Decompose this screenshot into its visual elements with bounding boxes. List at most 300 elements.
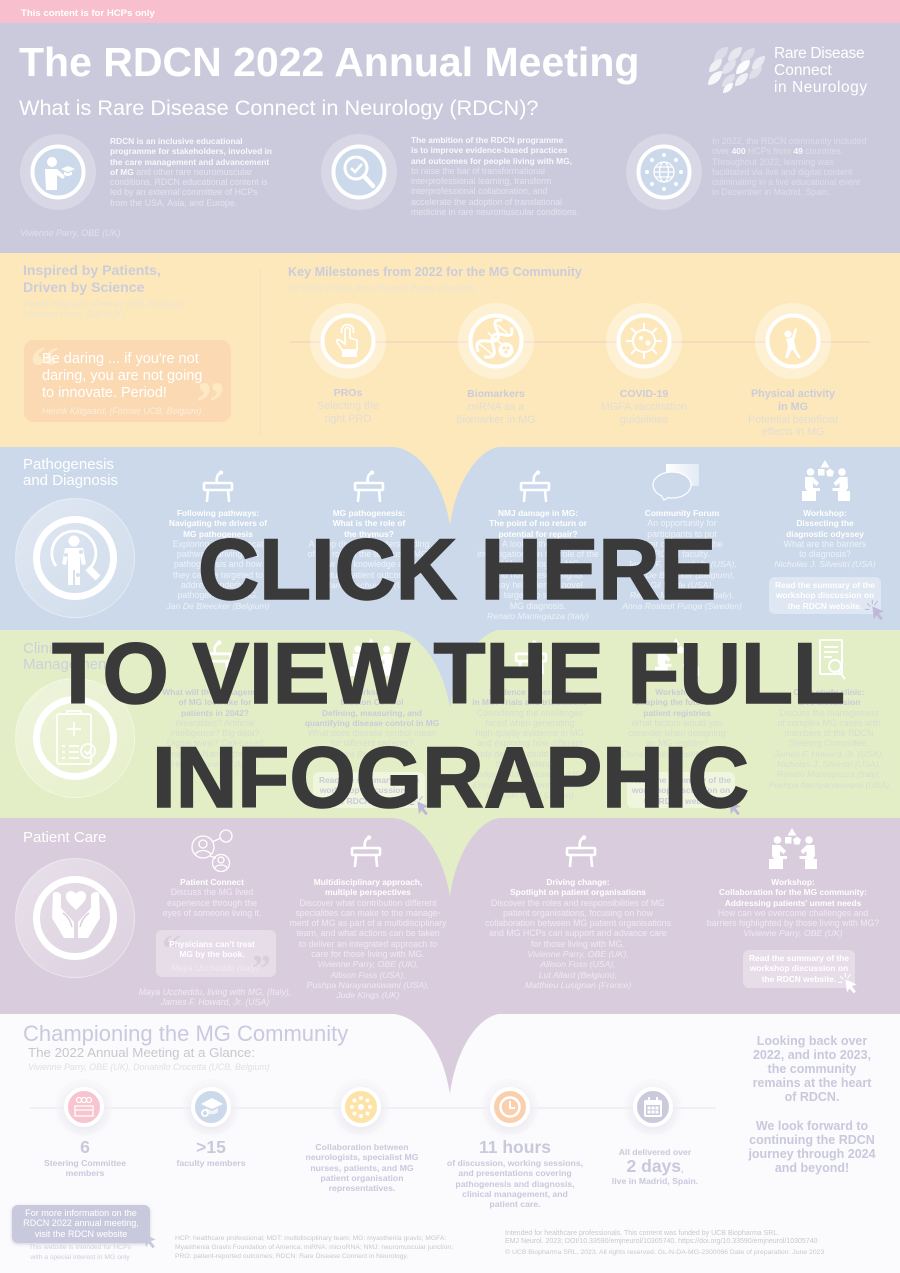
text: future of management: intelligence? Big data? bbox=[171, 728, 259, 738]
text: case study clinic: Steering Committee. bbox=[789, 738, 869, 748]
icon: workshop bbox=[350, 638, 394, 676]
calendar glyph bbox=[641, 1095, 665, 1119]
icon: cursor bbox=[865, 599, 886, 622]
text: community forum: Gil Wolfe (USA), bbox=[650, 580, 714, 590]
section heading bbox=[23, 641, 111, 672]
text: case study clinic: members of the RDCN bbox=[785, 728, 873, 738]
quote text: MG by the book. bbox=[179, 949, 245, 959]
text: community numbers: Throughout 2022, learning was bbox=[712, 157, 833, 167]
text: evidence generation: faced when generating bbox=[485, 718, 575, 728]
text: MG pathogenesis bbox=[308, 508, 430, 590]
button: workshop summary bbox=[769, 577, 881, 614]
text: MG pathogenesis: the thymus? bbox=[344, 529, 394, 539]
text: driving change bbox=[485, 877, 671, 990]
text: following pathways: Exploring the biological bbox=[173, 539, 263, 549]
text: workshop diagnostic odyssey: Workshop: bbox=[803, 508, 847, 518]
text: MG pathogenesis: Jan Verschuuren (UK) bbox=[326, 580, 412, 590]
timeline line bbox=[30, 1107, 716, 1109]
quote text: Be daring ... if you're not bbox=[42, 351, 199, 367]
text: mission control workshop: quantifying disease control in MG bbox=[305, 718, 439, 728]
callout: quote bbox=[24, 340, 231, 422]
text: future of management: What will the management bbox=[162, 687, 268, 697]
stat: collaboration: nurses, patients, and MG bbox=[310, 1163, 414, 1173]
text: workshop diagnostic odyssey: What are the barriers bbox=[784, 539, 866, 549]
icon: podium bbox=[514, 638, 548, 676]
text: NMJ damage: Renato Mantegazza (Italy) bbox=[487, 611, 589, 621]
text: multidisciplinary approach: care for those living with MG. bbox=[311, 949, 425, 959]
text: programme ambition: is to improve evidence-based practices bbox=[411, 145, 567, 155]
text: NMJ damage: NMJ damage in MG: bbox=[498, 508, 578, 518]
icon clipboard glyph bbox=[55, 710, 97, 768]
button: workshop summary bbox=[743, 950, 855, 988]
icon halo bbox=[606, 303, 682, 379]
text: following pathways: pathways driving MG bbox=[177, 549, 259, 559]
website note: This website is intended for HCPs bbox=[29, 1244, 131, 1251]
text: RDCN description bbox=[110, 136, 272, 208]
closing statement: continuing the RDCN bbox=[749, 1133, 875, 1147]
text: patient registries workshop: Elena Cortés-Vicente (Spain) bbox=[621, 749, 733, 759]
text: evidence generation: and exploring how different bbox=[477, 738, 583, 748]
stat: days bbox=[612, 1147, 698, 1187]
button: RDCN website bbox=[12, 1205, 150, 1243]
text: case study clinic: Live discussion bbox=[798, 697, 860, 707]
icon halo bbox=[626, 134, 702, 210]
text: workshop diagnostic odyssey: Dissecting the bbox=[796, 518, 854, 528]
quote text: daring, you are not going bbox=[42, 368, 202, 384]
quote attribution: Maya Uccheddu (Italy) bbox=[171, 963, 259, 973]
icon: workshop bbox=[802, 460, 850, 501]
button: workshop summary: workshop discussion on bbox=[776, 590, 874, 600]
text: future of management: patients in 2042? bbox=[181, 708, 249, 718]
icon halo bbox=[20, 134, 96, 210]
icon: clipboard bbox=[15, 678, 135, 798]
speaker credits bbox=[139, 987, 291, 1008]
overlay: click here call to action: TO VIEW THE FULL bbox=[52, 627, 845, 722]
icon: PROs touch bbox=[310, 303, 386, 379]
milestone: COVID-19: MGFA vaccination bbox=[601, 401, 687, 413]
milestone: physical activity: effects in MG bbox=[762, 426, 824, 438]
closing statement: journey through 2024 bbox=[748, 1147, 876, 1161]
text: following pathways: they can be targeted to bbox=[173, 570, 263, 580]
icon: steering committee bbox=[64, 1087, 104, 1127]
panel: patients and milestones bbox=[0, 253, 900, 447]
text: future of management: therapies? Nanotechnology? bbox=[159, 749, 271, 759]
logo text bbox=[774, 45, 868, 96]
stat: steering committee: Steering Committee bbox=[44, 1158, 126, 1168]
milestone: physical activity bbox=[748, 388, 838, 438]
milestone: COVID-19 bbox=[601, 388, 687, 426]
button: workshop summary: the RDCN website. bbox=[644, 796, 718, 806]
closing quote mark: ” bbox=[196, 370, 225, 435]
text: evidence generation: study designs could overcome bbox=[471, 749, 589, 759]
button: workshop summary: workshop discussion on bbox=[320, 785, 418, 795]
text: NMJ damage: A look at the latest bbox=[502, 539, 574, 549]
text: mission control workshop: Sara Brown (USA) bbox=[336, 749, 408, 759]
text: following pathways: MG pathogenesis bbox=[183, 529, 253, 539]
milestone: PROs bbox=[317, 387, 379, 425]
text: collaboration workshop: Collaboration for the MG community: bbox=[719, 887, 867, 897]
text: collaboration workshop bbox=[707, 877, 879, 939]
speaker credits: Gil Wolfe (USA), Anna Rostedt Punga (Sweden) bbox=[288, 283, 476, 293]
text: NMJ damage: MG diagnosis. bbox=[510, 601, 566, 611]
icon: clock bbox=[490, 1087, 530, 1127]
text: case study clinic: Discuss the management bbox=[779, 708, 879, 718]
text: community forum: Jan De Bleecker (Belgium), bbox=[629, 570, 735, 580]
stat: faculty: >15 bbox=[196, 1137, 226, 1157]
text: RDCN description: led by an external committee of HCPs bbox=[110, 187, 258, 197]
text: multidisciplinary approach bbox=[290, 877, 446, 1001]
text: driving change: Lut Allard (Belgium), bbox=[539, 970, 617, 980]
website note bbox=[29, 1243, 131, 1262]
text: NMJ damage: potential for repair? bbox=[498, 529, 578, 539]
text: patient connect: eyes of someone living it. bbox=[163, 908, 261, 918]
text: community forum: James F. Howard, Jr. (USA), bbox=[627, 559, 737, 569]
text: workshop diagnostic odyssey: diagnostic odyssey bbox=[786, 529, 864, 539]
network glyph bbox=[349, 1095, 373, 1119]
text: case study clinic: Renato Mantegazza (Italy), bbox=[777, 769, 881, 779]
text: mission control workshop: Defining, measuring, and bbox=[322, 708, 422, 718]
stat: collaboration: neurologists, specialist MG bbox=[306, 1152, 418, 1162]
text: case study clinic: Pushpa Narayanaswami (USA) bbox=[769, 780, 889, 790]
section heading: and Diagnosis bbox=[23, 472, 118, 488]
milestone: COVID-19: COVID-19 bbox=[620, 388, 668, 400]
opening quote mark: “ bbox=[162, 928, 181, 970]
text: NMJ damage bbox=[477, 508, 599, 621]
text: programme ambition: interprofessional learning, transform bbox=[411, 176, 551, 186]
text: community numbers bbox=[712, 136, 867, 197]
text: MG pathogenesis: MG pathogenesis: bbox=[333, 508, 405, 518]
callout: patient quote bbox=[156, 930, 276, 977]
text: patient registries workshop: patient registries bbox=[643, 708, 711, 718]
heading: inspired by patients: Inspired by Patients, bbox=[23, 262, 161, 278]
text: MG pathogenesis: A deep dive into understanding bbox=[309, 539, 429, 549]
text: case study clinic: of complex MG cases with bbox=[778, 718, 880, 728]
text: evidence generation: in MG: Trials and tribulations bbox=[472, 697, 588, 707]
stat: hours: patient care. bbox=[489, 1199, 541, 1209]
milestone: physical activity: in MG bbox=[778, 401, 808, 413]
section heading: Clinical bbox=[23, 640, 71, 657]
stat: collaboration: representatives. bbox=[329, 1183, 395, 1193]
icon: calendar bbox=[633, 1087, 673, 1127]
stat: days: 2 days, bbox=[627, 1156, 683, 1176]
icon: cursor bbox=[137, 1227, 158, 1250]
overlay: click here call to action: INFOGRAPHIC bbox=[152, 730, 749, 826]
text: collaboration workshop: How can we overcome challenges and bbox=[718, 908, 868, 918]
text: MG pathogenesis: future patient outcomes bbox=[323, 570, 415, 580]
button: workshop summary: the RDCN website. bbox=[788, 601, 862, 611]
icon: global community bbox=[626, 134, 702, 210]
text: mission control workshop: for different patients? bbox=[331, 738, 413, 748]
panel: introduction bbox=[0, 23, 900, 253]
text: mission control workshop: Mission Control bbox=[340, 697, 404, 707]
text: workshop diagnostic odyssey: Nicholas J. Silvestri (USA) bbox=[774, 559, 876, 569]
text: community forum: their questions to the bbox=[641, 539, 723, 549]
button: workshop summary: Read the summary of the bbox=[319, 775, 419, 785]
text: mission control workshop bbox=[305, 687, 439, 759]
text: multidisciplinary approach: ment of MG as part of a multidisciplinary bbox=[290, 918, 446, 928]
text: NMJ damage: investigations on the role of the bbox=[477, 549, 599, 559]
references: Intended for healthcare professionals. This content was funded by UCB Biopharma SRL. bbox=[505, 1230, 779, 1237]
text: future of management: Wearables? Artificial bbox=[175, 718, 255, 728]
text: patient registries workshop: an MG registry? bbox=[646, 738, 708, 748]
speaker credits: Vivienne Parry, OBE (UK), Donatello Crocetta (UCB, Belgium) bbox=[28, 1062, 270, 1072]
text: community numbers: In 2022, the RDCN community included bbox=[712, 136, 867, 146]
notch bbox=[0, 1014, 900, 1094]
text: following pathways: pathogenesis of MG. bbox=[177, 590, 259, 600]
milestone: biomarkers: Biomarkers bbox=[467, 388, 525, 400]
text: evidence generation: Hiroyuki Murai (Japan) bbox=[486, 790, 574, 800]
text: RDCN description: of MG and other rare neuromuscular bbox=[110, 167, 252, 177]
text: collaboration workshop: barriers highlighted by those living with MG? bbox=[707, 918, 879, 928]
text: programme ambition: The ambition of the RDCN programme bbox=[411, 135, 563, 145]
button: workshop summary: Read the summary of the bbox=[631, 775, 731, 785]
text: NMJ damage: NMJ pathology in MG, bbox=[494, 559, 582, 569]
text: community forum bbox=[622, 508, 742, 611]
icon: faculty bbox=[191, 1087, 231, 1127]
icon: educator bbox=[20, 134, 96, 210]
icon: workshop bbox=[655, 638, 699, 676]
text: multidisciplinary approach: to deliver an integrated approach to bbox=[299, 939, 437, 949]
stat: steering committee: 6 bbox=[80, 1137, 90, 1157]
closing quote mark: ” bbox=[252, 948, 271, 990]
section heading bbox=[23, 456, 118, 488]
heading: inspired by patients: Driven by Science bbox=[23, 279, 144, 295]
text: patient connect: Patient Connect bbox=[180, 877, 244, 887]
quote text bbox=[169, 939, 255, 960]
text: workshop diagnostic odyssey: to diagnosis? bbox=[799, 549, 851, 559]
text: future of management: Digital twins? Cell-based bbox=[167, 738, 263, 748]
text: patient connect: experience through the bbox=[167, 898, 257, 908]
text: RDCN description: conditions. RDCN educational content is bbox=[110, 177, 267, 187]
stat: hours: of discussion, working sessions, bbox=[447, 1158, 583, 1168]
icon halo bbox=[15, 498, 135, 618]
icon disc bbox=[320, 314, 376, 368]
button: workshop summary: workshop discussion on bbox=[750, 963, 848, 973]
text: RDCN description: the care management and advancement bbox=[110, 157, 269, 167]
text: patient connect bbox=[163, 877, 261, 918]
milestone: physical activity: Potential beneficial bbox=[748, 414, 838, 426]
stat: hours: pathogenesis and diagnosis, bbox=[455, 1179, 575, 1189]
closing statement: Looking back over bbox=[757, 1034, 867, 1048]
speaker credits: James F. Howard, Jr. (USA) bbox=[161, 997, 269, 1007]
text: following pathways: Navigating the drivers of bbox=[169, 518, 267, 528]
icon ring bbox=[33, 876, 117, 960]
text: community numbers: in December in Madrid, Spain. bbox=[712, 187, 830, 197]
divider bbox=[260, 268, 261, 437]
text: multidisciplinary approach: Vivienne Parry, OBE (UK), bbox=[317, 959, 419, 969]
button: RDCN website: For more information on the bbox=[25, 1208, 137, 1218]
text: community forum: Community Forum bbox=[645, 508, 719, 518]
closing statement: of RDCN. bbox=[785, 1090, 839, 1104]
heading: inspired by patients bbox=[23, 262, 161, 295]
stat: faculty bbox=[176, 1136, 246, 1168]
text: MG pathogenesis: What is the role of bbox=[333, 518, 405, 528]
panel: pathogenesis and diagnosis bbox=[0, 447, 900, 630]
text: following pathways: address underlying bbox=[181, 580, 255, 590]
milestone: biomarkers: biomarker in MG bbox=[456, 414, 536, 426]
stat: hours bbox=[447, 1136, 583, 1209]
text: multidisciplinary approach: multiple perspectives bbox=[325, 887, 411, 897]
text: case study clinic: Case study clinic: bbox=[793, 687, 865, 697]
icon: collaboration bbox=[341, 1087, 381, 1127]
text: NMJ damage: and how these insights bbox=[493, 570, 583, 580]
text: following pathways: pathogenesis and how bbox=[174, 559, 262, 569]
copyright: © UCB Biopharma SRL, 2023. All rights reserved. GL-N-DA-MG-2300066 Date of preparation: June 2023 bbox=[505, 1249, 824, 1256]
icon: podium bbox=[520, 470, 550, 502]
website note: with a special interest in MG only bbox=[30, 1254, 130, 1260]
speaker credits: Vivienne Parry, OBE (UK) bbox=[24, 309, 124, 319]
stat: steering committee bbox=[44, 1136, 126, 1179]
heading: key milestones: Key Milestones from 2022 for the MG Community bbox=[288, 265, 582, 279]
speaker credits bbox=[24, 299, 186, 319]
subtitle: What is Rare Disease Connect in Neurology (RDCN)? bbox=[19, 95, 538, 120]
milestone: biomarkers: miRNA as a bbox=[468, 401, 524, 413]
text: future of management: Henry Kaminski (USA) bbox=[172, 759, 258, 769]
text: following pathways: Jan De Bleecker (Belgium) bbox=[166, 601, 270, 611]
text: driving change: and MG HCPs can support and advance care bbox=[489, 928, 667, 938]
text: patient registries workshop: Shaping the future of bbox=[635, 697, 719, 707]
text: mission control workshop: Workshop: bbox=[350, 687, 394, 697]
icon disc bbox=[332, 144, 386, 200]
text: MG pathogenesis: of the role of the thymus in MG, bbox=[308, 549, 430, 559]
icon: physical activity bbox=[755, 303, 831, 379]
icon: patient connect bbox=[190, 828, 234, 872]
icon: cursor bbox=[410, 794, 431, 817]
icon hands and heart bbox=[50, 890, 102, 940]
icon: case study bbox=[818, 638, 846, 684]
text: evidence generation: these challenges. bbox=[496, 759, 564, 769]
icon: workshop bbox=[769, 828, 817, 869]
text: evidence generation: Evidence generation bbox=[489, 687, 571, 697]
heading: Championing the MG Community bbox=[23, 1021, 348, 1046]
milestone: PROs: PROs bbox=[334, 387, 362, 399]
text: multidisciplinary approach: Multidisciplinary approach, bbox=[314, 877, 422, 887]
closing statement: and beyond! bbox=[775, 1161, 849, 1175]
icon figure bbox=[50, 530, 100, 585]
notch bbox=[394, 447, 498, 524]
subheading: The 2022 Annual Meeting at a Glance: bbox=[28, 1045, 255, 1060]
stat: collaboration bbox=[306, 1142, 418, 1193]
text: programme ambition bbox=[411, 135, 579, 217]
text: workshop diagnostic odyssey bbox=[774, 508, 876, 569]
text: programme ambition: interprofessional collaboration, and bbox=[411, 186, 547, 196]
stat: hours: clinical management, and bbox=[462, 1189, 568, 1199]
references: EMJ Neurol. 2023; DOI/10.33590/emjneurol/10305740. https://doi.org/10.33590/emjneurol/10305740 bbox=[505, 1238, 818, 1245]
abbreviations: PRO: patient-reported outcomes; RDCN: Rare Disease Connect in Neurology. bbox=[175, 1253, 408, 1260]
text: patient registries workshop bbox=[621, 687, 733, 759]
speaker credit: Vivienne Parry, OBE (UK) bbox=[20, 228, 120, 238]
text: RDCN description: from the USA, Asia, and Europe. bbox=[110, 198, 237, 208]
icon disc bbox=[30, 144, 86, 200]
icon: COVID-19 virus bbox=[606, 303, 682, 379]
text: collaboration workshop: Workshop: bbox=[771, 877, 815, 887]
text: patient registries workshop: What factors would you bbox=[631, 718, 723, 728]
button: workshop summary: the RDCN website. bbox=[332, 796, 406, 806]
text: programme ambition: to raise the bar of transformational bbox=[411, 166, 545, 176]
text: driving change: for those living with MG. bbox=[531, 939, 625, 949]
text: NMJ damage: may help identify novel bbox=[493, 580, 583, 590]
icon halo bbox=[321, 134, 397, 210]
text: evidence generation bbox=[469, 687, 591, 800]
stat: steering committee: members bbox=[66, 1168, 104, 1178]
text: case study clinic bbox=[769, 687, 889, 790]
icon: podium bbox=[350, 835, 382, 867]
stat: days: All delivered over bbox=[619, 1147, 691, 1157]
text: NMJ damage: targets to support bbox=[504, 590, 572, 600]
icon: magnifier with check bbox=[321, 134, 397, 210]
button: workshop summary: workshop discussion on bbox=[632, 785, 730, 795]
text: multidisciplinary approach: Pushpa Narayanaswami (USA), bbox=[307, 980, 429, 990]
text: community forum: participants to put bbox=[647, 529, 717, 539]
panel: championing the MG community bbox=[0, 1014, 900, 1273]
text: multidisciplinary approach: Discover what contribution different bbox=[299, 898, 437, 908]
icon: podium bbox=[565, 835, 597, 867]
button: RDCN website: visit the RDCN website bbox=[35, 1229, 127, 1239]
icon ring bbox=[33, 516, 117, 600]
notch bbox=[0, 630, 900, 710]
icon ring bbox=[33, 696, 117, 780]
icon halo bbox=[310, 303, 386, 379]
text: community numbers: over 400 HCPs from 49 countries. bbox=[712, 146, 843, 156]
milestone: biomarkers bbox=[456, 388, 536, 426]
abbreviations: Myasthenia Gravis Foundation of America; miRNA: microRNA; NMJ: neuromuscular junction; bbox=[175, 1244, 453, 1251]
text: driving change: Vivienne Parry, OBE (UK), bbox=[527, 949, 629, 959]
icon: community forum speech bubbles bbox=[652, 464, 699, 501]
quote text: to innovate. Period! bbox=[42, 385, 167, 401]
text: collaboration workshop: Vivienne Parry, OBE (UK) bbox=[743, 928, 843, 938]
text: NMJ damage: The point of no return or bbox=[489, 518, 587, 528]
text: programme ambition: accelerate the adoption of translational bbox=[411, 197, 562, 207]
section heading: Management bbox=[23, 656, 111, 672]
closing statement: remains at the heart bbox=[753, 1076, 871, 1090]
text: case study clinic: Nicholas J. Silvestri (USA), bbox=[777, 759, 881, 769]
icon disc bbox=[766, 314, 820, 368]
text: multidisciplinary approach: team, and what actions can be taken bbox=[296, 928, 440, 938]
text: multidisciplinary approach: Allison Foss (USA), bbox=[330, 970, 406, 980]
text: community forum: An opportunity for bbox=[647, 518, 717, 528]
icon: cursor bbox=[722, 794, 743, 817]
text: driving change: collaboration between MG patient organisations bbox=[485, 918, 671, 928]
button: workshop summary: Read the summary of the bbox=[775, 580, 875, 590]
speaker credits: Henrik Klitgaard, (Former UCB, Belgium), bbox=[24, 299, 186, 309]
quote attribution: Henrik Klitgaard, (Former UCB, Belgium) bbox=[42, 406, 201, 416]
cap glyph bbox=[199, 1095, 223, 1119]
text: case study clinic: James F. Howard, Jr. (USA), bbox=[774, 749, 884, 759]
text: community forum: Renato Mantegazza (Italy), bbox=[630, 590, 734, 600]
logo text: Connect bbox=[774, 62, 832, 79]
quote text bbox=[42, 351, 202, 401]
icon: podium bbox=[202, 470, 234, 502]
icon disc bbox=[616, 314, 672, 368]
people glyph bbox=[72, 1095, 96, 1119]
closing statement: 2022, and into 2023, bbox=[753, 1048, 871, 1062]
button: workshop summary bbox=[627, 772, 735, 808]
text: future of management: of MG look like for bbox=[178, 697, 252, 707]
stat: collaboration: Collaboration between bbox=[315, 1142, 409, 1152]
icon: biomarkers DNA bbox=[458, 303, 534, 379]
banner text: This content is for HCPs only bbox=[21, 8, 155, 19]
text: driving change: patient organisations, focusing on how bbox=[503, 908, 653, 918]
section heading: Pathogenesis bbox=[23, 456, 114, 473]
closing statement bbox=[748, 1034, 876, 1175]
button: workshop summary bbox=[313, 772, 425, 808]
text: driving change: Matthieu Lusignan (France) bbox=[525, 980, 631, 990]
closing statement: We look forward to bbox=[756, 1119, 868, 1133]
button: RDCN website: RDCN 2022 annual meeting, bbox=[23, 1218, 139, 1228]
text: multidisciplinary approach: Jude Kings (UK) bbox=[336, 990, 400, 1000]
text: driving change: Spotlight on patient organisations bbox=[510, 887, 646, 897]
icon halo bbox=[755, 303, 831, 379]
